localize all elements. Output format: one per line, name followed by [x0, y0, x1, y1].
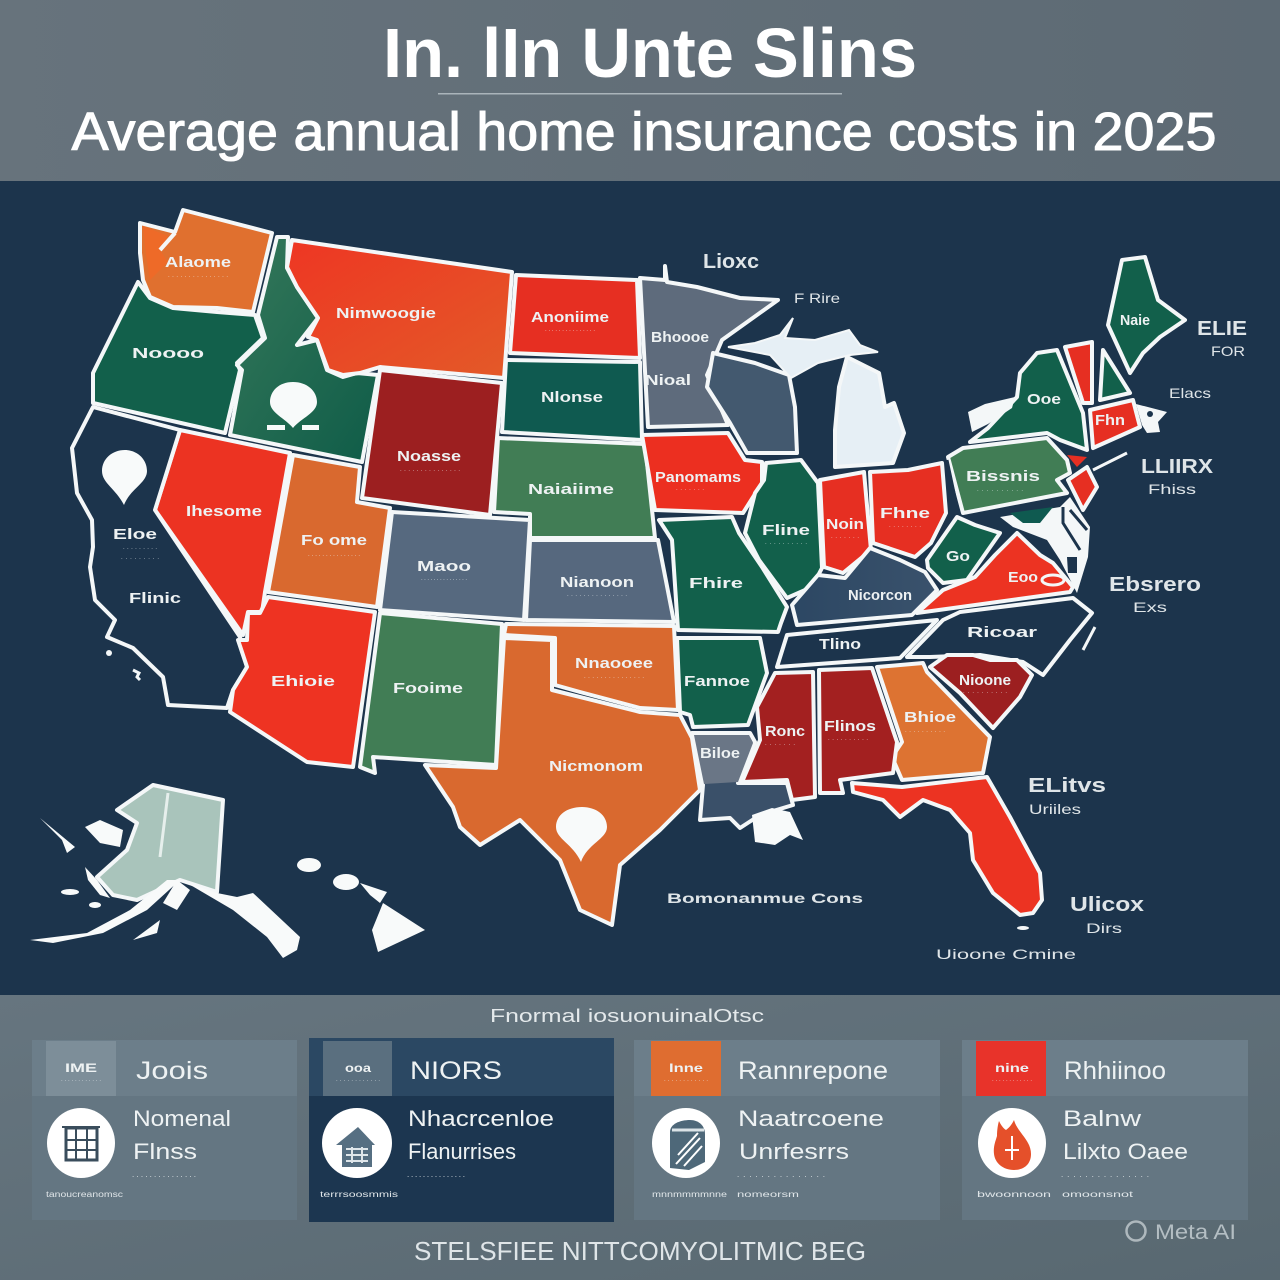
map panel background [0, 181, 1280, 995]
state: Oklahoma: ............... [584, 674, 644, 680]
card text: Flnss [133, 1139, 197, 1164]
state: Utah: ............... [308, 552, 360, 558]
callout labels: Ulicox [1070, 894, 1144, 916]
state: Georgia [877, 663, 990, 780]
state: New York [968, 350, 1087, 450]
card text: mnnmmmmnne [652, 1190, 728, 1199]
card: Rhhiinoo [962, 1040, 1248, 1220]
callout labels: Uriiles [1029, 801, 1081, 817]
card text: ............... [737, 1170, 825, 1179]
state: West Virginia [927, 517, 1000, 583]
state: Indiana: ....... [831, 534, 859, 540]
card text: ............... [1061, 1170, 1149, 1179]
state: Mississippi [742, 672, 815, 800]
state: Nevada: Ihesome [186, 503, 262, 520]
state: North Dakota: ............... [545, 327, 595, 333]
callout labels: LLIIRX [1141, 456, 1214, 478]
state: Michigan [728, 318, 904, 467]
callout labels: ELIE [1197, 318, 1247, 340]
state: North Carolina [907, 598, 1095, 675]
callout labels: ELitvs [1028, 775, 1106, 797]
state: Hawaii [297, 858, 425, 952]
card heading: NIORS [410, 1057, 502, 1085]
state: Ohio: ........ [889, 523, 921, 529]
state: Colorado: ............... [421, 576, 467, 582]
card text: Flanurrises [408, 1139, 516, 1164]
badge: nine [995, 1061, 1029, 1075]
state: California: Eloe [113, 526, 157, 543]
state: Washington: ............... [168, 273, 228, 279]
map of the United States [30, 210, 1185, 958]
state: Kentucky [792, 548, 937, 625]
state: Washington: Alaome [165, 254, 231, 271]
state: Georgia: .......... [905, 728, 945, 734]
callout labels: Bomonanmue Cons [667, 890, 863, 906]
state: New Jersey [1067, 455, 1097, 510]
footer text: STELSFIEE NITTCOMYOLITMIC BEG [414, 1236, 866, 1266]
badge: ooa [345, 1061, 371, 1075]
state: Oregon: Noooo [132, 345, 204, 362]
state: Ohio [870, 463, 946, 557]
card text: ............... [407, 1170, 465, 1179]
state: North Dakota: Anoniime [531, 309, 609, 326]
state: South Dakota [502, 360, 642, 440]
icon: house [322, 1108, 392, 1178]
callout labels: F Rire [794, 290, 840, 306]
watermark: Meta AI [1126, 1221, 1236, 1244]
state: Virginia: Eoo [1008, 569, 1038, 586]
icon: roof shingles [652, 1108, 720, 1178]
state: Wyoming [362, 370, 502, 515]
state: New Mexico [360, 613, 502, 773]
state: Arkansas [677, 638, 767, 727]
header band [0, 0, 1280, 181]
state: Vermont [1065, 342, 1092, 403]
icon: map pin Texas [556, 807, 607, 862]
state: Minnesota: Nioal [645, 372, 691, 389]
state: Kansas: ............... [567, 592, 627, 598]
state: Pennsylvania: Bissnis [966, 468, 1040, 485]
state: Maine [1108, 257, 1185, 373]
state: Maine: Naie [1120, 312, 1150, 329]
card text: Balnw [1063, 1106, 1141, 1131]
card text [46, 1106, 231, 1199]
callout labels: Ebsrero [1109, 574, 1201, 596]
callout labels: Exs [1133, 599, 1167, 615]
callout labels: Elacs [1169, 385, 1211, 401]
card text: terrrsoosmmis [320, 1190, 398, 1199]
badge: ............ [664, 1077, 708, 1083]
badge: ............ [336, 1077, 380, 1083]
state: South Carolina [930, 655, 1032, 728]
state: Pennsylvania: .......... [977, 487, 1023, 493]
state: Montana: Nimwoogie [336, 305, 436, 322]
card: Ranmesone [634, 1040, 940, 1220]
state: Texas [425, 638, 700, 925]
card: Niors [309, 1038, 614, 1222]
state: Ohio: Fhne [880, 505, 930, 522]
callout labels: Dirs [1086, 920, 1122, 936]
state: North Carolina: Ricoar [967, 624, 1037, 641]
state: Colorado: Maoo [417, 558, 471, 575]
state: Wisconsin [707, 353, 797, 453]
state: Alabama: Flinos [824, 718, 876, 735]
badge: ............ [61, 1077, 101, 1083]
state: Florida [852, 777, 1042, 930]
card text: Unrfesrrs [739, 1139, 849, 1164]
state: New York: Ooe [1027, 391, 1061, 408]
state: North Dakota [510, 275, 640, 358]
state: South Carolina: .......... [963, 689, 1007, 695]
card text: ............... [132, 1170, 196, 1179]
state: Arizona: Ehioie [271, 673, 335, 690]
state: Alabama: .......... [828, 736, 868, 742]
badge [976, 1041, 1046, 1096]
state: Illinois: .......... [765, 540, 807, 546]
state: Illinois [745, 460, 822, 598]
state: Washington [140, 210, 272, 312]
card text [320, 1106, 554, 1199]
callout labels [667, 251, 1247, 962]
state: California: ......... [123, 545, 157, 551]
state: Arkansas: Fannoe [684, 673, 750, 690]
state: Missouri [659, 517, 787, 632]
card text [652, 1106, 884, 1199]
callout labels: Fhiss [1148, 481, 1196, 497]
badge [46, 1041, 116, 1096]
state: Kansas: Nianoon [560, 574, 634, 591]
title: In. lIn Unte Slins [383, 14, 917, 92]
state: Kentucky: Nicorcon [848, 587, 912, 604]
state: Iowa: Panomams [655, 469, 741, 486]
state: Wyoming: ............... [400, 467, 460, 473]
state: Missouri: Fhire [689, 575, 743, 592]
state: Wyoming: Noasse [397, 448, 461, 465]
icon: map pin Idaho [267, 382, 319, 430]
card heading: Joois [136, 1057, 208, 1085]
state: Indiana [820, 472, 871, 573]
state: Oregon [93, 282, 263, 433]
icon: window grid [47, 1108, 115, 1178]
card text: tanoucreanomsc [46, 1190, 123, 1199]
state: Mississippi: Ronc [765, 723, 805, 740]
callout labels: Lioxc [703, 251, 759, 273]
state: Virginia [917, 533, 1073, 613]
state: New Hampshire [1100, 350, 1130, 400]
state: Massachusetts [1090, 400, 1167, 470]
badge: Inne [669, 1061, 703, 1075]
state: Texas: Nicmonom [549, 758, 643, 775]
card text: omoonsnot [1062, 1190, 1134, 1199]
state: South Dakota: Nlonse [541, 389, 603, 406]
state: Louisiana [692, 733, 803, 845]
card text: bwoonnoon [977, 1190, 1051, 1199]
state: Nebraska: Naiaiime [528, 481, 614, 498]
state: Illinois: Fline [762, 522, 810, 539]
state: New Mexico: Fooime [393, 680, 463, 697]
state: Utah [268, 455, 390, 607]
card: Joois [32, 1040, 297, 1220]
state: Indiana: Noin [826, 516, 864, 533]
state: Massachusetts: Fhn [1095, 412, 1125, 429]
card text: Lilxto Oaee [1063, 1139, 1188, 1164]
badge: IME [65, 1061, 97, 1075]
state: California: ......... [121, 555, 159, 561]
callout labels: FOR [1211, 343, 1245, 359]
badge [323, 1041, 392, 1096]
state: Tennessee [777, 620, 937, 667]
state: Alaska [30, 785, 300, 958]
legend heading: Fnormal iosuonuinalOtsc [490, 1006, 764, 1026]
icon: flame [978, 1108, 1046, 1178]
card text: Nhacrcenloe [408, 1106, 554, 1131]
coastline: Delmarva peninsula [1000, 497, 1090, 593]
state: Idaho [230, 237, 378, 462]
state: Oklahoma [504, 624, 678, 710]
state: Iowa: ....... [676, 486, 704, 492]
state: Nevada [155, 430, 290, 635]
state: Kansas [526, 540, 674, 622]
card text [977, 1106, 1188, 1199]
state: South Carolina: Nioone [959, 672, 1011, 689]
subtitle: Average annual home insurance costs in 2025 [72, 102, 1216, 162]
card heading: Rannrepone [738, 1057, 888, 1085]
state: Louisiana: Biloe [700, 745, 740, 762]
callout labels: Uioone Cmine [936, 946, 1076, 962]
state: Arizona [230, 597, 375, 767]
state: Colorado [380, 512, 530, 620]
state: West Virginia: Go [946, 548, 970, 565]
badge [651, 1041, 721, 1096]
state: California: Flinic [129, 590, 181, 607]
badge: ............ [992, 1077, 1032, 1083]
card text: nomeorsm [737, 1190, 800, 1199]
watermark: Meta AI: Meta AI [1155, 1221, 1236, 1244]
icon: map pin California [102, 450, 147, 505]
state: Tennessee: Tlino [819, 636, 861, 653]
card heading: Rhhiinoo [1064, 1057, 1166, 1085]
state: Mississippi: ....... [765, 741, 795, 747]
state: Minnesota: Bhoooe [651, 329, 709, 346]
state: Nebraska [494, 438, 655, 538]
state: Iowa [642, 433, 762, 513]
state: Montana [287, 240, 512, 378]
state: Oklahoma: Nnaooee [575, 655, 653, 672]
state: California [72, 407, 247, 708]
state: Utah: Fo ome [301, 532, 367, 549]
bottom panel [0, 995, 1280, 1280]
state: Georgia: Bhioe [904, 709, 956, 726]
state: Minnesota [640, 266, 778, 427]
card text: Naatrcoene [738, 1106, 884, 1131]
state: Alabama [819, 668, 897, 793]
card text: Nomenal [133, 1106, 231, 1131]
state: Pennsylvania [947, 438, 1070, 513]
